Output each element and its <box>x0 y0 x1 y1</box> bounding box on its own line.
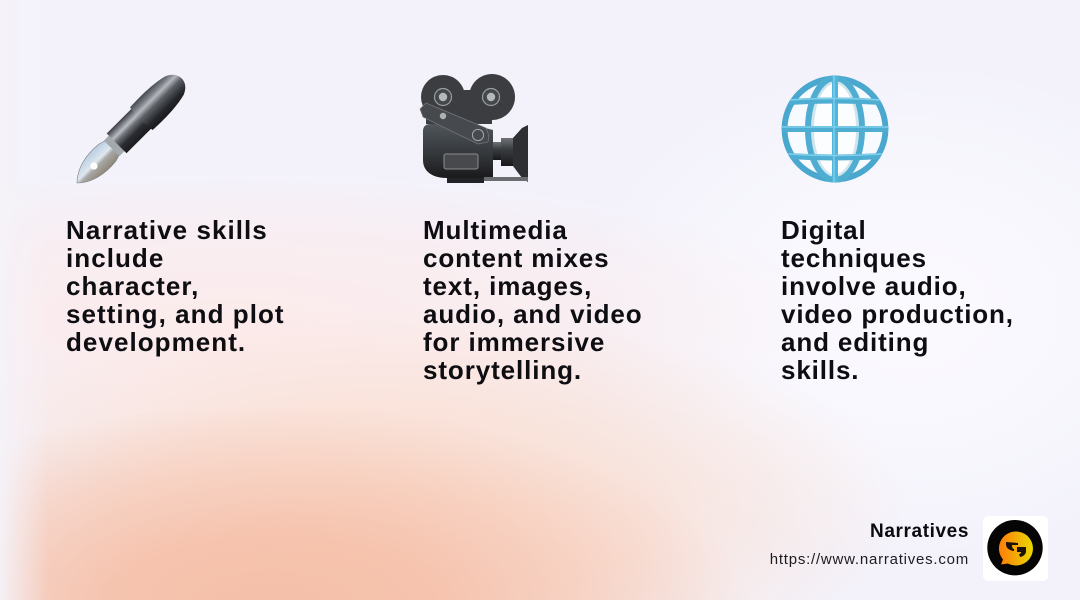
lens <box>493 142 502 160</box>
website url: https://www.narratives.com <box>770 551 969 568</box>
text: multimedia content <box>423 215 643 385</box>
brand name: Narratives <box>870 521 969 542</box>
text: multimedia content: for immersive <box>423 327 605 357</box>
arm <box>420 103 489 144</box>
text: narrative skills <box>66 215 285 357</box>
text: multimedia content: content mixes <box>423 243 610 273</box>
text: multimedia content: storytelling. <box>423 355 582 385</box>
text: narrative skills: Narrative skills <box>66 215 268 245</box>
film body base <box>447 176 484 183</box>
text: multimedia content: Multimedia <box>423 215 568 245</box>
text: narrative skills: setting, and plot <box>66 299 285 329</box>
text: narrative skills: include <box>66 243 164 273</box>
logo <box>983 516 1048 581</box>
text: digital techniques: video production, <box>781 299 1014 329</box>
text: multimedia content: audio, and video <box>423 299 643 329</box>
icon: movie camera <box>420 74 528 183</box>
text: digital techniques: involve audio, <box>781 271 967 301</box>
text: digital techniques: techniques <box>781 243 927 273</box>
text: digital techniques: Digital <box>781 215 867 245</box>
text: multimedia content: text, images, <box>423 271 592 301</box>
text: narrative skills: character, <box>66 271 199 301</box>
camera body <box>423 124 493 178</box>
text: digital techniques: skills. <box>781 355 859 385</box>
text: narrative skills: development. <box>66 327 246 357</box>
text: digital techniques <box>781 215 1014 385</box>
icon: fountain pen <box>76 74 186 184</box>
icon: globe <box>782 76 888 182</box>
text: digital techniques: and editing <box>781 327 929 357</box>
film reels <box>421 74 515 124</box>
